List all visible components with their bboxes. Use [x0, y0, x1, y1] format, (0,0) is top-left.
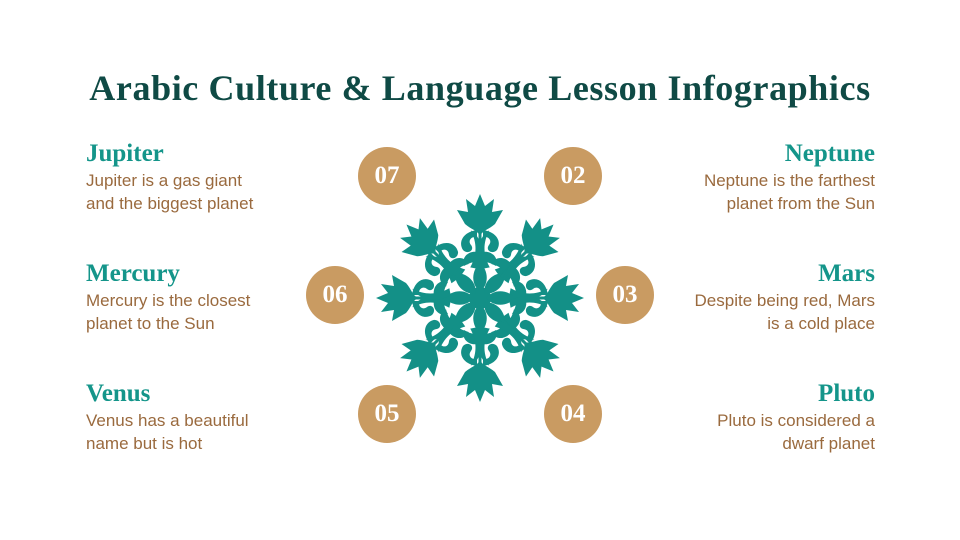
item: Jupiter: Jupiter is a gas giant [86, 171, 242, 190]
item: Venus: Venus has a beautiful [86, 411, 249, 430]
item: Pluto: dwarf planet [782, 434, 875, 453]
item: Neptune: planet from the Sun [727, 194, 875, 213]
circle 02 [544, 147, 602, 205]
circle 07 [358, 147, 416, 205]
item: Venus: Venus [86, 380, 150, 407]
circle 02: 02 [560, 162, 586, 189]
circle 07: 07 [374, 162, 400, 189]
item: Venus: name but is hot [86, 434, 202, 453]
item: Pluto: Pluto is considered a [717, 411, 875, 430]
item: Jupiter [86, 140, 254, 213]
item: Neptune: Neptune [785, 140, 875, 167]
circle 06 [306, 266, 364, 324]
item: Pluto [717, 380, 875, 453]
icon: ornament [376, 194, 584, 402]
item: Mars [695, 260, 875, 333]
item: Neptune: Neptune is the farthest [704, 171, 875, 190]
circle 05 [358, 385, 416, 443]
circle 05: 05 [374, 400, 400, 427]
item: Mars: is a cold place [767, 314, 875, 333]
item: Mercury: Mercury is the closest [86, 291, 250, 310]
item: Venus [86, 380, 249, 453]
item: Mars: Mars [818, 260, 875, 287]
circle 03: 03 [612, 281, 638, 308]
item: Pluto: Pluto [818, 380, 875, 407]
circle 06: 06 [322, 281, 348, 308]
item: Neptune [704, 140, 875, 213]
item: Mercury [86, 260, 250, 333]
circle 04 [544, 385, 602, 443]
circle 04: 04 [560, 400, 586, 427]
item: Jupiter: and the biggest planet [86, 194, 253, 213]
title: Arabic Culture & Language Lesson Infographics [89, 68, 871, 108]
item: Mercury: planet to the Sun [86, 314, 215, 333]
circle 03 [596, 266, 654, 324]
item: Mars: Despite being red, Mars [695, 291, 875, 310]
item: Mercury: Mercury [86, 260, 180, 287]
item: Jupiter: Jupiter [86, 140, 164, 167]
